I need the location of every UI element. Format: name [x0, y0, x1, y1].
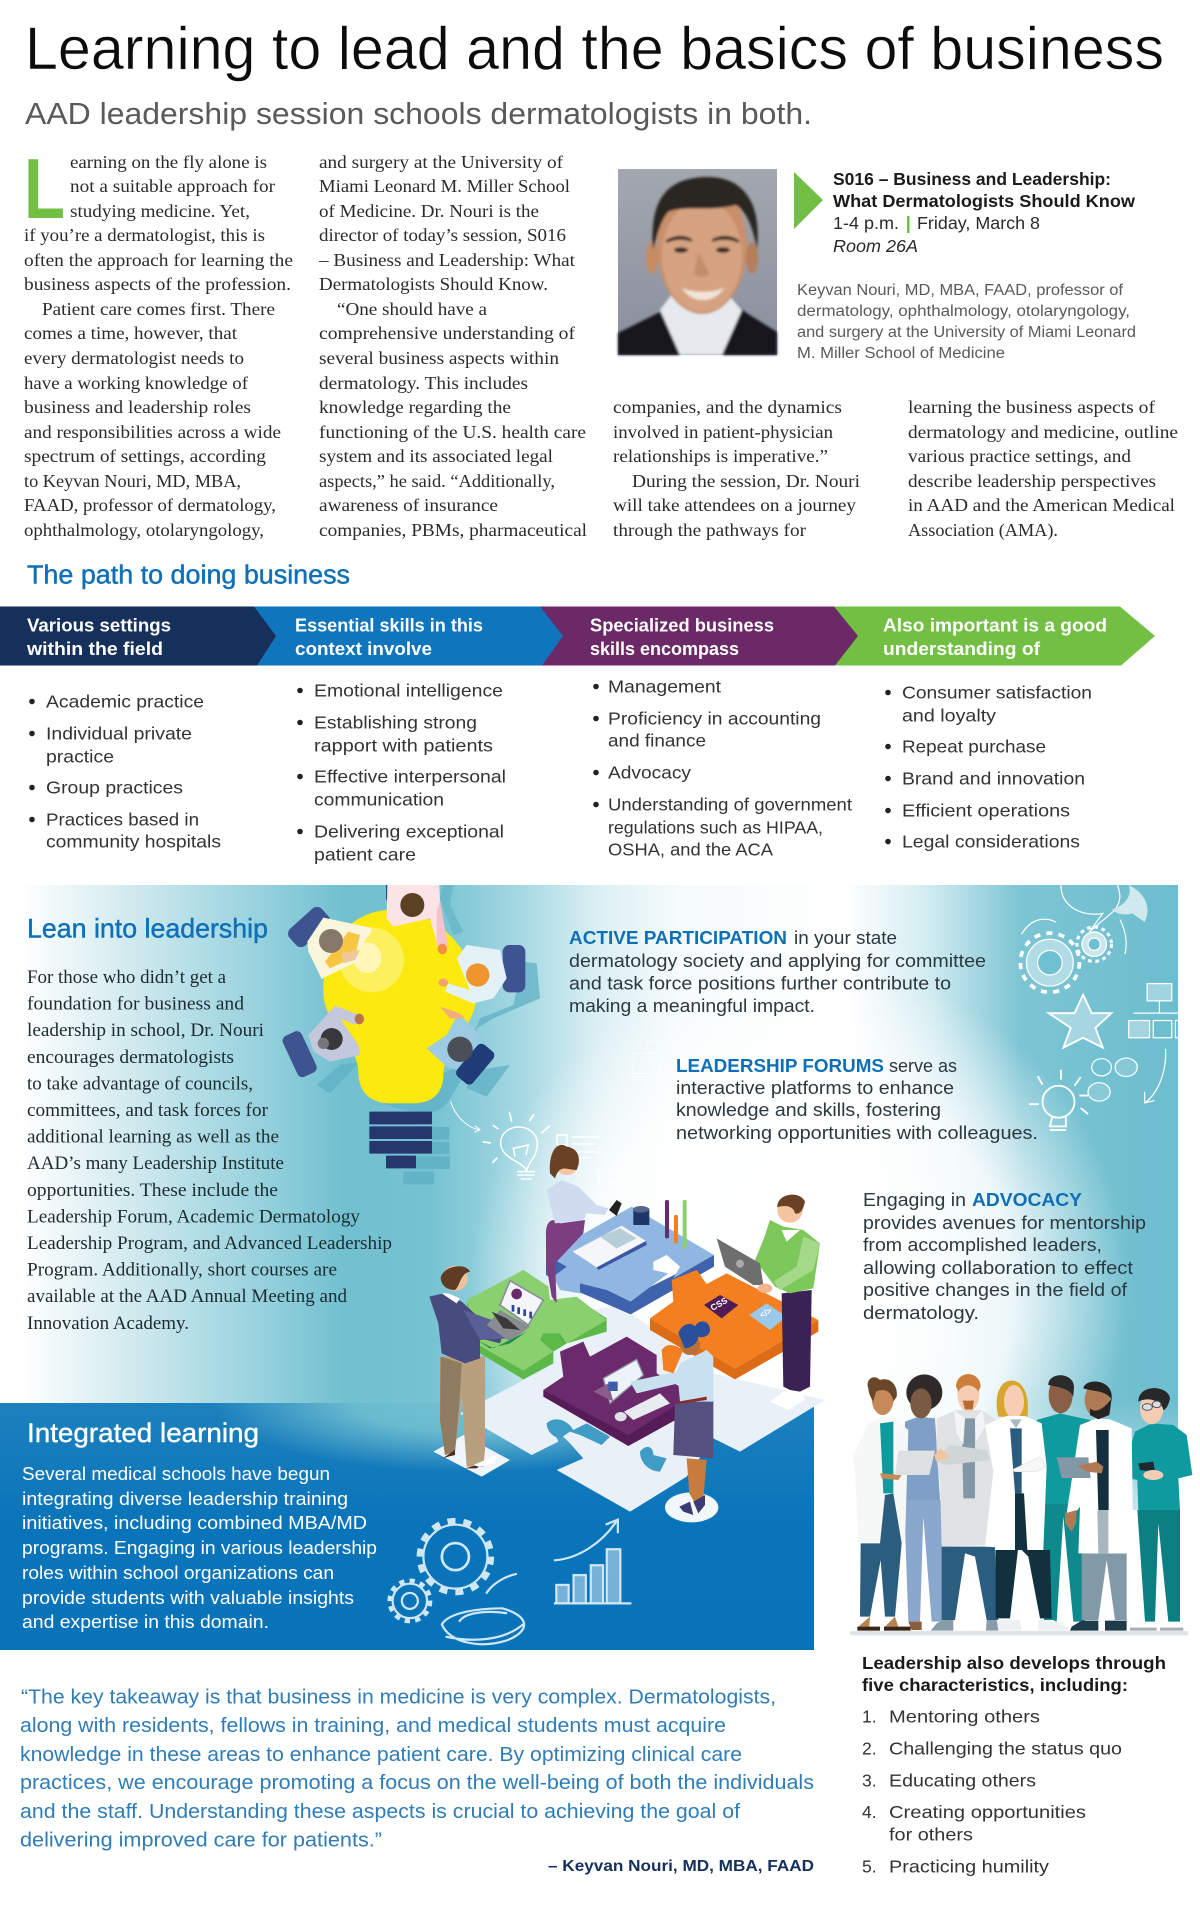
article text: column 2: system and its associated legal	[319, 446, 553, 466]
chevron: green	[830, 606, 1155, 666]
list: also important	[885, 682, 1092, 852]
text: lean into leadership body: leadership in school, Dr. Nouri	[27, 1021, 264, 1041]
list: specialized business skills: regulations such as HIPAA,	[608, 818, 823, 838]
chevron: purple	[530, 606, 858, 666]
heading: lean into leadership: Lean into leadership	[27, 914, 268, 944]
text: integrated learning body: and expertise in this domain.	[22, 1612, 269, 1632]
chevron band: Also important is a good	[883, 614, 1107, 636]
text: advocacy: ADVOCACY	[972, 1190, 1082, 1210]
table shadow	[383, 962, 540, 1113]
speaker bio: dermatology, ophthalmology, otolaryngology,	[797, 303, 1130, 320]
list: also important: Brand and innovation	[902, 768, 1085, 788]
article text: column 1 with drop cap: earning on the fly alone is	[70, 152, 267, 172]
article text: column 2: director of today’s session, S016	[319, 225, 566, 245]
subtitle: AAD leadership session schools dermatologists in both.	[25, 96, 812, 131]
session info callout: Room 26A	[833, 236, 918, 256]
article text: column 1 with drop cap: studying medicine. Yet,	[70, 201, 250, 221]
article text: column 1 with drop cap: spectrum of settings, according	[24, 446, 266, 466]
list: various settings: community hospitals	[46, 832, 221, 852]
article text: column 1 with drop cap: Patient care comes first. There	[42, 299, 275, 319]
person: top	[386, 885, 448, 954]
text: lean into leadership body	[27, 968, 392, 1334]
list: five characteristics: Mentoring others	[889, 1707, 1040, 1727]
session info callout: S016 – Business and Leadership:	[833, 169, 1111, 189]
article text: column 1 with drop cap	[24, 142, 293, 540]
list: also important: and loyalty	[902, 706, 996, 726]
article text: column 3: companies, and the dynamics	[613, 397, 842, 417]
list: five characteristics: Creating opportunities	[889, 1802, 1086, 1822]
pull quote	[20, 1685, 814, 1852]
icon: line light bulb	[483, 1112, 550, 1179]
purple puzzle piece	[543, 1383, 712, 1446]
text: advocacy: allowing collaboration to effect	[863, 1258, 1133, 1278]
icons: integrated learning line drawings	[390, 1520, 631, 1644]
chevron band	[0, 606, 1155, 666]
list: five characteristics: Educating others	[889, 1771, 1036, 1791]
icon: curved arrow	[1145, 1049, 1166, 1103]
heading: integrated learning: Integrated learning	[27, 1418, 259, 1448]
list: essential skills: Delivering exceptional	[314, 822, 504, 842]
chevron band: Specialized business	[590, 614, 774, 636]
article text: column 3	[613, 397, 860, 540]
text: lean into leadership body: additional learning as well as the	[27, 1128, 279, 1148]
speaker bio	[797, 282, 1136, 362]
list: essential skills: Emotional intelligence	[314, 680, 503, 700]
text: integrated learning body: provide students with valuable insights	[22, 1588, 354, 1608]
text: leadership forums: LEADERSHIP FORUMS	[676, 1056, 884, 1076]
text: integrated learning body	[22, 1464, 377, 1632]
icon: gears	[1020, 919, 1126, 992]
article text: column 2: and surgery at the University of	[319, 152, 563, 172]
man at left	[429, 1266, 513, 1468]
pull quote: “The key takeaway is that business in medicine is very complex. Dermatologists,	[21, 1685, 776, 1708]
text: leadership forums: interactive platforms to enhance	[676, 1078, 954, 1098]
tube bars	[665, 1200, 687, 1248]
orange puzzle piece	[650, 1318, 818, 1379]
icon tiles: </>	[758, 1305, 774, 1320]
icon: green arrow	[794, 172, 823, 229]
text: lean into leadership body: to take advantage of councils,	[27, 1074, 253, 1094]
text: leadership forums: serve as	[889, 1056, 957, 1076]
text: lean into leadership body: AAD’s many Leadership Institute	[27, 1154, 284, 1174]
text: advocacy: positive changes in the field of	[863, 1280, 1128, 1300]
woman at back	[546, 1145, 622, 1303]
person: top left	[285, 904, 372, 979]
tablet held by doctor 1	[895, 1451, 935, 1475]
text: advocacy: provides avenues for mentorship	[863, 1213, 1146, 1233]
panel: teal gradient background	[0, 885, 1178, 1510]
list: also important: Efficient operations	[902, 800, 1070, 820]
pull quote: knowledge in these areas to enhance patient care. By optimizing clinical care	[20, 1743, 742, 1766]
text: advocacy: dermatology.	[863, 1303, 979, 1323]
woman in front	[630, 1321, 713, 1515]
icon: white arrow	[718, 1153, 757, 1173]
decorative line icons centre	[598, 1027, 757, 1189]
article text: column 2: of Medicine. Dr. Nouri is the	[319, 201, 539, 221]
text: active participation	[569, 928, 986, 1016]
illustration: puzzle team	[429, 1145, 825, 1522]
article text: column 2: functioning of the U.S. health care	[319, 422, 586, 442]
article text: column 4: in AAD and the American Medical	[908, 495, 1175, 515]
list: various settings: Individual private	[46, 724, 192, 744]
article text: column 2	[318, 152, 587, 540]
text: lean into leadership body: Leadership Program, and Advanced Leadership	[27, 1234, 392, 1254]
bulb base	[369, 1112, 450, 1184]
article text: column 1 with drop cap: comes a time, however, that	[24, 323, 237, 343]
text: lean into leadership body: available at the AAD Annual Meeting and	[27, 1287, 348, 1307]
article text: column 2: comprehensive understanding of	[319, 323, 575, 343]
doctor 4: white coat blonde	[985, 1381, 1070, 1631]
icon: mouse	[442, 1574, 524, 1644]
list: five characteristics: 4.	[862, 1802, 877, 1822]
article text: column 1 with drop cap: every dermatologist needs to	[24, 348, 244, 368]
article text: column 2: – Business and Leadership: What	[318, 250, 575, 270]
list: specialized business skills: Advocacy	[608, 762, 691, 782]
list: five characteristics: 3.	[862, 1771, 877, 1791]
session info callout	[794, 169, 1135, 256]
text: active participation: making a meaningful impact.	[569, 996, 815, 1016]
icon: arrow to lightbulb	[451, 1102, 480, 1132]
icon: org chart	[1129, 984, 1183, 1038]
text: advocacy: Engaging in	[863, 1190, 966, 1210]
heading: the path to doing business: The path to doing business	[27, 562, 350, 590]
text: lean into leadership body: opportunities. These include the	[27, 1181, 278, 1201]
mug	[633, 1208, 649, 1225]
article text: column 3: relationships is imperative.”	[613, 446, 828, 466]
text: leadership forums: networking opportunities with colleagues.	[676, 1123, 1038, 1143]
text: lean into leadership body: committees, and task forces for	[27, 1101, 268, 1121]
chevron band: understanding of	[883, 638, 1041, 659]
text: integrated learning body: Several medical schools have begun	[22, 1464, 330, 1484]
pull quote: delivering improved care for patients.”	[20, 1828, 382, 1852]
list: five characteristics: Leadership also develops through	[862, 1653, 1166, 1673]
laptop on green piece	[477, 1281, 543, 1348]
icon: star	[1049, 995, 1111, 1048]
list: specialized business skills: Proficiency in accounting	[608, 708, 821, 728]
list: also important: Repeat purchase	[902, 736, 1046, 756]
text: leadership forums: knowledge and skills, fostering	[676, 1100, 941, 1120]
speaker bio: Keyvan Nouri, MD, MBA, FAAD, professor of	[797, 282, 1124, 299]
article text: column 2: Dermatologists Should Know.	[319, 274, 548, 294]
list: specialized business skills: Understanding of government	[608, 794, 852, 814]
blue puzzle piece	[546, 1255, 714, 1314]
list: essential skills: Effective interpersonal	[314, 766, 506, 786]
list: also important: Legal considerations	[902, 832, 1080, 852]
title: Learning to lead and the basics of business	[25, 15, 1164, 82]
laptop and keyboard on purple piece	[593, 1359, 670, 1421]
article text: column 3: During the session, Dr. Nouri	[632, 471, 860, 491]
icon: line chart	[598, 1145, 643, 1183]
article text: column 2: several business aspects within	[319, 348, 559, 368]
article text: column 2: awareness of insurance	[319, 495, 498, 515]
list: five characteristics: 2.	[862, 1739, 877, 1759]
list: specialized business skills: Management	[608, 676, 721, 696]
green puzzle piece	[467, 1270, 607, 1379]
article text: column 1 with drop cap: have a working knowledge of	[24, 373, 248, 393]
tablet document on blue piece	[573, 1226, 646, 1267]
article text: column 2: dermatology. This includes	[319, 373, 528, 393]
article text: column 3: will take attendees on a journey	[613, 495, 856, 515]
photo: Keyvan Nouri portrait	[618, 169, 777, 355]
session info callout: 1-4 p.m.	[833, 213, 899, 233]
session info callout: Friday, March 8	[917, 213, 1040, 233]
yellow bulb table	[323, 910, 477, 1103]
list: five characteristics: 5.	[862, 1856, 877, 1876]
text: active participation: dermatology society and applying for committee	[569, 951, 986, 971]
speaker bio: and surgery at the University of Miami Leonard	[797, 324, 1136, 341]
article text: column 4: learning the business aspects of	[908, 397, 1155, 417]
list: specialized business skills: OSHA, and the ACA	[608, 840, 773, 860]
article text: column 1 with drop cap: often the approach for learning the	[24, 250, 293, 270]
icon: small laptop	[630, 1027, 717, 1077]
text: active participation: and task force positions further contribute to	[569, 974, 951, 994]
icon: small gear	[390, 1581, 430, 1621]
article text: column 4: Association (AMA).	[908, 520, 1058, 541]
icon tiles: CSS	[709, 1295, 729, 1313]
chevron band: within the field	[26, 638, 163, 659]
article text: column 3: involved in patient-physician	[613, 422, 833, 442]
illustration: light bulb meeting table	[281, 885, 550, 1184]
list: various settings: Practices based in	[46, 810, 199, 830]
icon: bulb	[1029, 1070, 1088, 1130]
text: active participation: ACTIVE PARTICIPATION	[569, 928, 787, 948]
list: various settings: Group practices	[46, 778, 183, 798]
text: lean into leadership body: Innovation Academy.	[27, 1314, 189, 1334]
icon: people	[674, 1166, 708, 1189]
panel: integrated learning background	[0, 1403, 814, 1650]
list: five characteristics	[862, 1653, 1166, 1876]
chevron: navy	[0, 606, 276, 666]
illustration: doctors team	[850, 1374, 1192, 1635]
text: lean into leadership body: encourages dermatologists	[27, 1048, 234, 1068]
chevron band: skills encompass	[590, 638, 739, 659]
article text: column 2: “One should have a	[337, 299, 487, 319]
text: lean into leadership body: foundation for business and	[27, 995, 245, 1015]
icon: large gear	[420, 1521, 491, 1592]
speaker bio: M. Miller School of Medicine	[797, 345, 1005, 362]
article text: column 1 with drop cap: to Keyvan Nouri, MD, MBA,	[24, 471, 241, 491]
list: essential skills: Establishing strong	[314, 712, 477, 732]
icon: speech bubbles	[1061, 885, 1120, 932]
list: specialized business skills	[593, 676, 852, 860]
text: integrated learning body: roles within school organizations can	[22, 1563, 334, 1583]
text: lean into leadership body: Program. Additionally, short courses are	[27, 1261, 337, 1281]
text: lean into leadership body: Leadership Forum, Academic Dermatology	[27, 1207, 361, 1227]
article text: column 4: dermatology and medicine, outline	[908, 422, 1178, 442]
doctor 2: blue scrubs	[903, 1374, 943, 1630]
chevron band: Essential skills in this	[295, 614, 483, 636]
doctor 5: teal scrubs	[1037, 1375, 1090, 1622]
article text: column 4: various practice settings, and	[908, 446, 1131, 466]
article text: column 1 with drop cap: ophthalmology, otolaryngology,	[24, 520, 264, 540]
quote attribution: – Keyvan Nouri, MD, MBA, FAAD	[548, 1858, 814, 1875]
doctor 3: grey coat	[931, 1374, 999, 1631]
list: essential skills: patient care	[314, 844, 416, 864]
doctor 7: teal sweater	[1122, 1388, 1192, 1631]
chevron: blue	[240, 606, 563, 666]
article text: column 3: through the pathways for	[613, 520, 806, 540]
list: five characteristics: 1.	[862, 1707, 877, 1727]
icon: stars	[613, 1133, 627, 1143]
icon tiles	[704, 1295, 787, 1330]
text: advocacy: from accomplished leaders,	[863, 1235, 1102, 1255]
pull quote: practices, we encourage promoting a focus on the well-being of both the individuals	[20, 1771, 814, 1794]
doctor 1: white coat	[853, 1377, 911, 1631]
article text: column 2: aspects,” he said. “Additionally,	[319, 471, 555, 491]
text: active participation: in your state	[794, 928, 897, 948]
text: integrated learning body: programs. Engaging in various leadership	[22, 1538, 377, 1558]
text: integrated learning body: initiatives, including combined MBA/MD	[22, 1513, 367, 1533]
article text: column 2: knowledge regarding the	[319, 397, 511, 417]
article text: column 4	[908, 397, 1178, 541]
article text: column 1 with drop cap: not a suitable approach for	[70, 176, 275, 196]
icon: message bubbles	[1088, 1058, 1137, 1101]
article text: column 1 with drop cap: and responsibilities across a wide	[24, 422, 281, 442]
text: lean into leadership body: For those who didn’t get a	[27, 968, 226, 988]
man at right	[717, 1195, 820, 1410]
list: various settings	[29, 692, 221, 852]
list: essential skills: communication	[314, 790, 444, 810]
text: leadership forums	[676, 1056, 1038, 1143]
article text: column 4: describe leadership perspectives	[908, 471, 1156, 491]
text: advocacy	[863, 1190, 1146, 1323]
list: five characteristics: Practicing humility	[889, 1856, 1049, 1876]
person: right	[438, 945, 525, 1003]
list: essential skills: rapport with patients	[314, 736, 493, 756]
person: lower left	[281, 1006, 364, 1079]
article text: column 1 with drop cap: business aspects of the profession.	[24, 274, 291, 294]
person: lower right	[427, 1007, 497, 1087]
article text: column 1 with drop cap: if you’re a dermatologist, this is	[24, 225, 265, 245]
session info callout: What Dermatologists Should Know	[833, 191, 1135, 211]
list: also important: Consumer satisfaction	[902, 682, 1092, 702]
list: five characteristics: Challenging the status quo	[889, 1739, 1122, 1759]
icon: checklist	[557, 1135, 600, 1160]
pull quote: along with residents, fellows in training, and medical students must acquire	[20, 1714, 726, 1737]
article text: column 2: companies, PBMs, pharmaceutical	[319, 520, 587, 540]
text: integrated learning body: integrating diverse leadership training	[22, 1489, 348, 1509]
article text: column 1 with drop cap: business and leadership roles	[24, 397, 251, 417]
article text: column 1 with drop cap: FAAD, professor of dermatology,	[24, 495, 276, 515]
white base puzzle	[460, 1305, 825, 1512]
icon: bar chart	[554, 1520, 631, 1603]
list: essential skills	[297, 680, 506, 864]
list: various settings: practice	[46, 746, 114, 766]
list: five characteristics: for others	[889, 1825, 973, 1845]
ground line	[850, 1631, 1188, 1635]
drop cap: L	[24, 142, 65, 237]
chevron band: context involve	[295, 638, 432, 659]
list: specialized business skills: and finance	[608, 730, 706, 750]
doctor 6: white coat with tablet	[1057, 1382, 1133, 1631]
chevron band: Various settings	[27, 614, 171, 636]
pull quote: and the staff. Understanding these aspects is crucial to achieving the goal of	[20, 1800, 740, 1823]
list: five characteristics: five characteristics, including:	[862, 1675, 1128, 1695]
icons: right panel line drawings	[1020, 885, 1183, 1130]
list: various settings: Academic practice	[46, 692, 204, 712]
article text: column 2: Miami Leonard M. Miller School	[319, 176, 570, 196]
